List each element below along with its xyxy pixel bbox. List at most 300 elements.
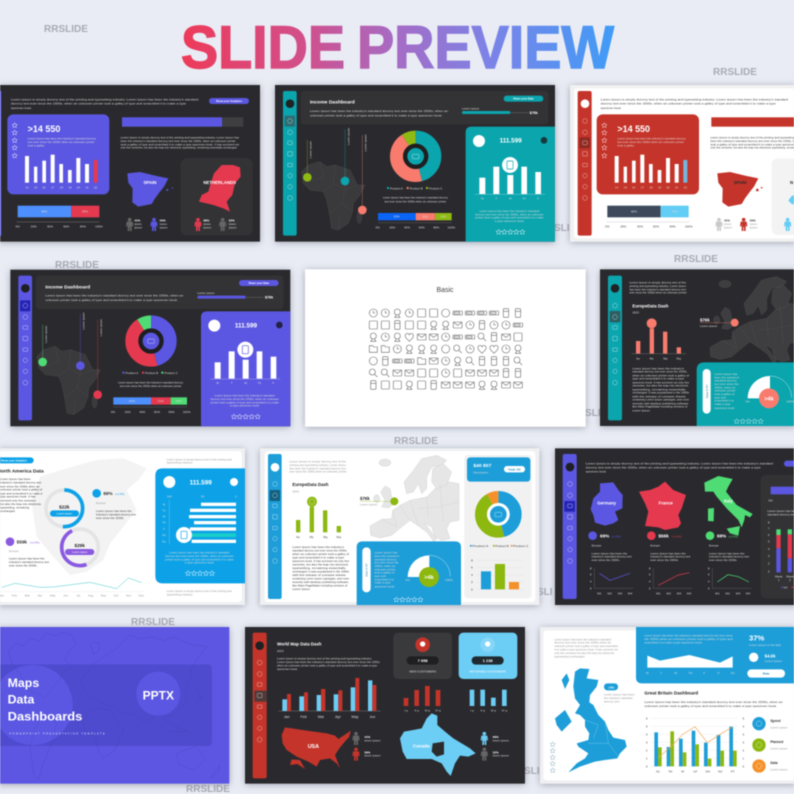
line chart: France [649, 566, 692, 596]
donut chart [396, 137, 435, 175]
combo chart: 5 [646, 724, 648, 728]
panel: slide 2 Income Dashboard teal [275, 85, 555, 242]
header text: Lorem Ipsum is simply dummy text of the printing and typesetting industry. Lorem Ipsum has been the industry's standard [601, 98, 788, 102]
panel: 111.599 horizontal bars: Lorem Ipsum has been the industry's standard [169, 551, 230, 555]
panel: gauge: 1500s, when an [374, 564, 396, 568]
stacked bar: 60% [63, 224, 70, 228]
caption [118, 380, 184, 388]
intro text: typesetting unchanged [554, 655, 585, 659]
stacked bar: 35% [672, 210, 678, 214]
header panel: unknown printer took a galley of type and scrambled it to make a type specimen book. [45, 298, 178, 302]
card: 14 550 bar chart [597, 114, 699, 194]
intro text: ever since the 1500s when an unknown printer [629, 291, 687, 295]
combo chart: 0 [742, 764, 744, 768]
panel: top area chart: Data [763, 672, 770, 676]
body text: like Aldus PageMaker including versions of [292, 583, 347, 587]
bar chart: Mg [323, 535, 328, 539]
body text: containing Lorem Ipsum passages, and more [292, 576, 349, 580]
panel: 111.599 horizontal bars: printer took a galley of type and scrambled it to make [165, 557, 234, 561]
watermark text: RRSLIDE [394, 436, 438, 447]
description [644, 700, 783, 708]
combo chart [646, 716, 744, 774]
card: 14 550 bar chart: took a galley [28, 143, 45, 147]
panel: 111.599 bar chart: F [537, 196, 539, 200]
legend: Product C [513, 544, 529, 548]
caption top: typesetting industry. [167, 461, 193, 465]
line chart: Germany: W1 [597, 592, 602, 596]
title: PREVIEW [357, 14, 614, 81]
column: France stats: $56k [658, 533, 669, 538]
stat: 59k: Lorem Ipsum has been the [9, 557, 45, 561]
sidebar [578, 91, 592, 236]
stat: 69%: 69% [103, 491, 114, 496]
panel: 111.599 bar chart: M [481, 196, 484, 200]
combo chart: 4 [742, 724, 744, 728]
icon grid [369, 309, 523, 389]
column: France stats: industry's standard dummy text [650, 555, 690, 559]
body text: containing Lorem Ipsum passages, and more [632, 398, 689, 402]
panel: 111.599 bar chart: Lorem Ipsum has been the industry's standard [479, 209, 540, 213]
people stats USA: lorem ipsum [364, 738, 381, 742]
body text [292, 545, 349, 591]
callout: +3%: +3% [608, 685, 614, 689]
legend item: Spend: Lorem ipsum [770, 726, 788, 730]
header panel: $76k [265, 296, 274, 300]
body text: with the release of Letraset sheets [292, 573, 346, 577]
bar chart: 8 [471, 558, 473, 562]
small bar chart red: I q [404, 709, 408, 713]
heading: World Map Data Dash [277, 642, 322, 647]
stacked bar: 20% [31, 224, 37, 228]
intro text: printing and typesetting industry. Lorem Ipsum [289, 463, 346, 467]
panel: top area chart: W [674, 671, 677, 675]
panel: right stacked chart: 0 [768, 569, 770, 573]
body text: type and scrambled it to make a type [292, 555, 344, 559]
stat: 59k: (+1.0%) [30, 540, 39, 544]
card: 14 550 bar chart: 15 [624, 185, 627, 189]
panel: right stacked chart: 1 [778, 578, 780, 582]
stat: 69%: Europe [96, 501, 106, 505]
title: Maps [8, 676, 39, 690]
card: 14 550 bar chart: took a galley [617, 143, 635, 147]
body text: been the industry's standard dummy text ever since the 1500s, when an unknown printer [121, 139, 236, 143]
bar chart: My [650, 356, 654, 360]
stacked bar: 50% [129, 399, 135, 403]
people stats: lorem [724, 222, 732, 226]
map: France: France [659, 500, 673, 505]
people stats Canada [481, 732, 509, 761]
line chart: Italy: W3 [736, 592, 741, 596]
line chart: Italy: 4 [708, 579, 710, 583]
title: Data [8, 693, 35, 707]
legend item: Data [752, 759, 788, 773]
line chart: Sep [101, 594, 106, 598]
PPTX label: PPTX [143, 689, 174, 703]
grouped bar chart: Jan [284, 715, 290, 719]
body text: type and scrambled it to make a type [632, 377, 684, 381]
legend: Product B [145, 371, 158, 375]
people stats Netherlands: lorem [229, 222, 237, 226]
panel: slide 7 North America data [0, 448, 245, 605]
panel: right stacked chart: AA [783, 586, 787, 590]
panel: gauge: unknown printer [374, 567, 396, 571]
heading: 2023 [277, 649, 284, 653]
title: SLIDE [181, 14, 345, 81]
people stats Netherlands: lorem [203, 222, 211, 226]
body text: recently with desktop publishing software [292, 580, 349, 584]
caption: Lorem Ipsum has been the industry's standard dummy [118, 380, 184, 384]
combo chart: NC [718, 770, 723, 774]
small bar chart blue: IV q [502, 709, 507, 713]
panel: 111.599 horizontal bars: 0 [235, 494, 237, 498]
card: 14 550 bar chart: 18 [60, 185, 63, 189]
combo chart: 4 [646, 732, 648, 736]
grouped bar chart: Apr [335, 715, 342, 719]
card: returned customers: RETURNED CUSTOMERS [469, 669, 506, 673]
header text [601, 98, 788, 110]
intro text: unchanged [0, 509, 15, 513]
people stats Spain: 41% [134, 218, 141, 222]
body text: took a galley of type and scrambled it to make a type specimen book. It has survived not [121, 142, 239, 146]
legend: Product A [472, 544, 488, 548]
caption bottom [167, 589, 232, 596]
callout: +3% [604, 683, 635, 703]
map: Europe with pin [700, 277, 794, 363]
line chart: Feb [12, 594, 17, 598]
stars [550, 742, 555, 773]
watermark text: SLI [554, 223, 570, 234]
people stats Netherlands: 68% [203, 218, 210, 222]
panel: top area chart: $4.6k [765, 653, 776, 658]
panel: gauge: took a galley of [714, 392, 735, 396]
panel: 111.599 bar chart: M [216, 381, 219, 385]
panel: gauge: type and [714, 395, 726, 399]
panel: gauge: text ever since the [714, 382, 739, 386]
panel: 111.599 horizontal bars: Th [162, 521, 166, 525]
stat: 59k [6, 537, 49, 568]
people stats Netherlands: ipsum [229, 225, 237, 229]
grouped bar chart: Jun [369, 715, 375, 719]
people stats USA: 59% [364, 750, 371, 754]
map: Europe with pin: $76k [360, 496, 370, 501]
progress bar [122, 117, 243, 127]
line chart: Aug [88, 594, 94, 598]
card: 14 550 bar chart: 20 [77, 185, 80, 189]
body text: like Aldus PageMaker including versions of [632, 405, 687, 409]
intro text: printing and typesetting industry. Lorem Ipsum [629, 284, 686, 288]
panel: gauge: Lorem Ipsum has [374, 551, 398, 555]
combo chart: 5 [742, 716, 744, 720]
panel: right stacked chart: 0% [769, 499, 773, 503]
people stats [715, 218, 791, 231]
combo chart: W [681, 770, 684, 774]
bar chart: My [310, 535, 314, 539]
line chart: Italy: 8 [708, 566, 710, 570]
combo chart: 3 [742, 740, 744, 744]
combo chart: TH [668, 770, 672, 774]
line chart: Germany: 0 [590, 586, 592, 590]
panel: top area chart: SU [731, 671, 735, 675]
stat: 59k: $59k [17, 539, 27, 544]
panel: right stacked chart: Week [786, 574, 794, 578]
panel: right stacked chart: 4 [768, 547, 770, 551]
intro text: ever since the 1500s when an [0, 484, 40, 488]
card: 14 550 bar chart: 19 [68, 185, 72, 189]
body text: Lorem Ipsum is simply dummy text of the printing and typesetting industry. Lorem Ipsum has [121, 136, 239, 140]
stacked bar [16, 206, 103, 228]
panel: right stacked chart: 2 [789, 578, 791, 582]
line chart: France: W4 [687, 592, 692, 596]
people stats Spain [126, 218, 168, 231]
bar chart: 6 [471, 566, 473, 570]
column: Germany stats: Lorem Ipsum has been the [592, 551, 628, 555]
panel: top area chart: 37% [749, 634, 765, 643]
map: Africa with pins: Lorem ipsum [309, 141, 313, 158]
map: Spain [717, 172, 762, 207]
small bar chart red [404, 686, 441, 713]
map: France [639, 482, 686, 530]
card: new customers: NEW CUSTOMERS [409, 669, 436, 673]
panel: right stacked chart: 3 [768, 554, 770, 558]
panel: gauge: >4k [424, 575, 435, 581]
line chart: Italy: W4 [746, 592, 751, 596]
panel: 111.599 horizontal bars: a type specimen book [185, 561, 214, 565]
line chart: France: 8 [649, 566, 651, 570]
sidebar [283, 91, 297, 236]
donut chart [132, 322, 170, 360]
card: 14 550 bar chart: 16 [42, 185, 46, 189]
legend [387, 186, 443, 190]
card: 40 807: Total: 1% [508, 467, 521, 471]
description: Lorem Ipsum has been the industry's standard dummy text ever since the 1500s, when an [644, 700, 783, 704]
body text: when an unknown printer took a galley of [632, 373, 689, 377]
combo chart: FT [731, 770, 735, 774]
caption bottom: Lorem Ipsum is simply dummy text of the printing and [167, 589, 232, 593]
header panel: Income Dashboard [45, 284, 90, 290]
legend item: Planned: Lorem ipsum [770, 747, 788, 751]
stacked bar [605, 206, 693, 228]
intro text: has been the industry's standard dummy text [289, 466, 346, 470]
map: Spain [127, 172, 173, 207]
world map outline [8, 632, 220, 780]
panel: gauge: text ever since the [374, 561, 399, 565]
stacked bar: 0% [16, 224, 20, 228]
heading: 2023 [292, 489, 299, 493]
header text: dummy text ever since the 1500s, when an unknown printer took a galley of type and scrambled it to make a type [601, 102, 776, 106]
stacked bar [111, 397, 191, 414]
line chart: Jun [63, 594, 68, 598]
card: new customers [393, 633, 452, 679]
card: 14 550 bar chart: Lorem Ipsum has been the industry's standard dummy [28, 137, 96, 141]
people stats: lorem [750, 222, 758, 226]
body text: only five centuries, but also the leap into electronic typesetting, remaining essentially unchanged. [121, 146, 237, 150]
stacked bar: 19% [176, 399, 182, 403]
panel: 111.599 bar chart: 111.599 [235, 322, 258, 329]
header panel: Lorem Ipsum has been the industry's standard dummy text ever since the 1500s, when an [310, 109, 448, 113]
column: Italy stats: Lorem Ipsum has been the [709, 551, 745, 555]
panel: top area chart: F [703, 671, 705, 675]
legend: Product A [390, 186, 403, 190]
map: USA: USA [308, 744, 319, 750]
panel: gauge: specimen book [714, 406, 735, 410]
button: Show your Analytics [216, 99, 243, 103]
panel: 111.599 bar chart: dummy text ever since the 1500s, when an unknown [475, 212, 544, 216]
panel: 111.599 horizontal bars: 111.599 [190, 479, 212, 486]
panel: 111.599 horizontal bars: F [163, 527, 165, 531]
people stats Spain: ipsum [160, 225, 168, 229]
body text: Lorem Ipsum has been the industry's [632, 366, 685, 370]
intro text: industry's standard dummy text [0, 481, 41, 485]
card: returned customers [459, 633, 517, 679]
heading [292, 482, 329, 493]
button [784, 461, 794, 467]
panel: 111.599 bar chart: printer took a galley of type and scrambled it to make [475, 216, 544, 220]
sidebar [563, 454, 577, 599]
body text: unchanged. It was popularised in the 1960s [292, 569, 349, 573]
legend item: Data: Lorem ipsum [770, 768, 788, 772]
line chart: Oct [114, 594, 118, 598]
stat: 59k: industry's standard dummy text [9, 560, 49, 564]
map: Italy: Italy [724, 499, 733, 504]
stacked bar: 80% [433, 225, 440, 229]
line chart: Italy [708, 566, 751, 596]
header panel: $76k [530, 111, 539, 115]
panel: 111.599 horizontal bars: Tu [162, 508, 166, 512]
people stats Canada: lorem ipsum [493, 738, 509, 742]
combo chart: 2 [742, 748, 744, 752]
stacked bar: 40% [47, 224, 53, 228]
header panel [301, 91, 548, 124]
stat: 69%: Lorem Ipsum has been the [96, 509, 132, 513]
map: Spain: SPAIN [734, 180, 746, 185]
caption bottom: typesetting industry. [167, 592, 193, 596]
body text: typesetting, remaining essentially [292, 566, 346, 570]
stacked bar: 20% [125, 410, 131, 414]
combo chart: A1 [656, 770, 660, 774]
title [8, 676, 82, 723]
heading [277, 642, 322, 653]
panel: 111.599 bar chart: 111.599 [500, 138, 522, 145]
stat: 69%: ever since the 1500s. [96, 516, 125, 520]
panel: gauge: scrambled it to [374, 577, 394, 581]
stacked bar: 100% [183, 410, 191, 414]
line chart: Italy: 0 [708, 586, 710, 590]
intro text: dummy text ever since the 1500s when an [554, 641, 611, 645]
intro text: Lorem Ipsum is simply dummy text of the [629, 281, 686, 285]
stat: 59k: ever since the 1500s. [9, 564, 38, 568]
stacked bar: 40% [139, 410, 146, 414]
header text: dummy text ever since the 1500s, when an unknown printer took a galley of type and scrambled it to make a type [11, 102, 186, 106]
caption top [167, 457, 232, 465]
stacked bar: 0% [376, 225, 380, 229]
panel: top area chart: Lorem Ipsum in the field [749, 643, 781, 647]
intro text: Lorem Ipsum has been the industry's standard [554, 637, 611, 641]
legend: Product B [410, 186, 423, 190]
line chart: France: W2 [666, 592, 671, 596]
panel: gauge: Lorem Ipsum has [714, 372, 738, 376]
panel: top area chart: Lorem Ipsum [765, 659, 783, 663]
body text: Lorem Ipsum. [292, 587, 311, 591]
panel: top area chart: S [717, 671, 719, 675]
intro text: when an unknown printer took a galley of type and scrambled it to make a type [277, 663, 377, 667]
card: 40 807: Description [473, 470, 489, 474]
line chart: Italy: W1 [715, 592, 720, 596]
panel: gauge: unknown printer [714, 389, 736, 393]
circle behind title [0, 665, 73, 745]
body text: specimen book. It has survived not only five [292, 559, 349, 563]
column: France stats [647, 531, 690, 562]
panel: 111.599 bar chart: printer took a galley of type and scrambled it to make [210, 400, 279, 404]
watermark text: SLI [524, 766, 540, 777]
stacked bar: 19% [440, 215, 447, 219]
panel: gauge: 0% [406, 578, 410, 582]
card: 14 550 bar chart: >14 550 [28, 124, 60, 134]
people stats Canada: 32% [493, 750, 499, 754]
card: 40 807: $40 807 [473, 463, 492, 469]
panel: slide 12 Great Britain dashboard light [540, 627, 794, 784]
card: 14 550 bar chart: 17 [51, 185, 55, 189]
panel: 111.599 horizontal bars: Sa [162, 533, 166, 537]
map: Africa with pins: Lorem ipsum [44, 325, 48, 343]
people stats Spain: lorem [134, 222, 142, 226]
grouped bar chart: Mar [318, 715, 325, 719]
legend: Product C [164, 371, 178, 375]
people stats: ipsum [724, 225, 732, 229]
grouped bar chart: Feb [301, 715, 307, 719]
body text: Lorem Ipsum has been the industry's [292, 545, 345, 549]
panel: Netherlands [772, 158, 794, 235]
callout: +3%: the industry's standard [604, 696, 633, 700]
small bar chart red: II q [415, 709, 419, 713]
stacked bar: 80% [169, 410, 175, 414]
header text [586, 461, 773, 473]
intro text: typesetting, remaining [0, 505, 30, 509]
small bar chart blue [470, 690, 507, 713]
subtitle: POWERPOINT PRESENTATION TEMPLATE [9, 732, 105, 736]
people stats Spain: 59% [160, 218, 166, 222]
body text: Lorem Ipsum. [632, 408, 651, 412]
panel: top area chart: T [660, 671, 662, 675]
panel: Netherlands: N [790, 180, 793, 185]
card: 14 550 bar chart: text ever since the 1500s when an unknown printer [28, 140, 94, 144]
panel: right column [464, 455, 532, 598]
button: Show your Analytics [1, 458, 28, 462]
caption: text ever since the 1500s when an unknown printer [384, 199, 446, 203]
panel: gauge: 100% [786, 399, 794, 403]
card: 14 550 bar chart: 19 [658, 185, 662, 189]
bar chart: Ap [296, 535, 300, 539]
progress bar [711, 117, 794, 127]
caption top: Lorem Ipsum is simply dummy text of the printing and [167, 457, 232, 461]
panel: slide 8 Europe data light [260, 448, 539, 605]
panel: right stacked chart: Week [775, 574, 783, 578]
heading: Great Britain Dashboard [644, 691, 698, 696]
sidebar [18, 276, 32, 420]
map: North America background [32, 458, 147, 575]
stacked bar: 20% [389, 225, 396, 229]
stat: 69% [92, 489, 136, 520]
column: Germany stats: 69% [600, 533, 610, 538]
panel: 111.599 horizontal bars [155, 468, 245, 583]
circle behind PPTX [136, 672, 180, 716]
panel: gauge: 1500s, when an [714, 385, 736, 389]
stacked bar: 100% [685, 224, 693, 228]
panel: gauge: >4k [764, 396, 775, 402]
map: Canada: Canada [413, 744, 430, 749]
panel: gauge: standard dummy [374, 557, 397, 561]
stacked bar: 0% [111, 410, 115, 414]
bar chart: Wg [336, 535, 341, 539]
